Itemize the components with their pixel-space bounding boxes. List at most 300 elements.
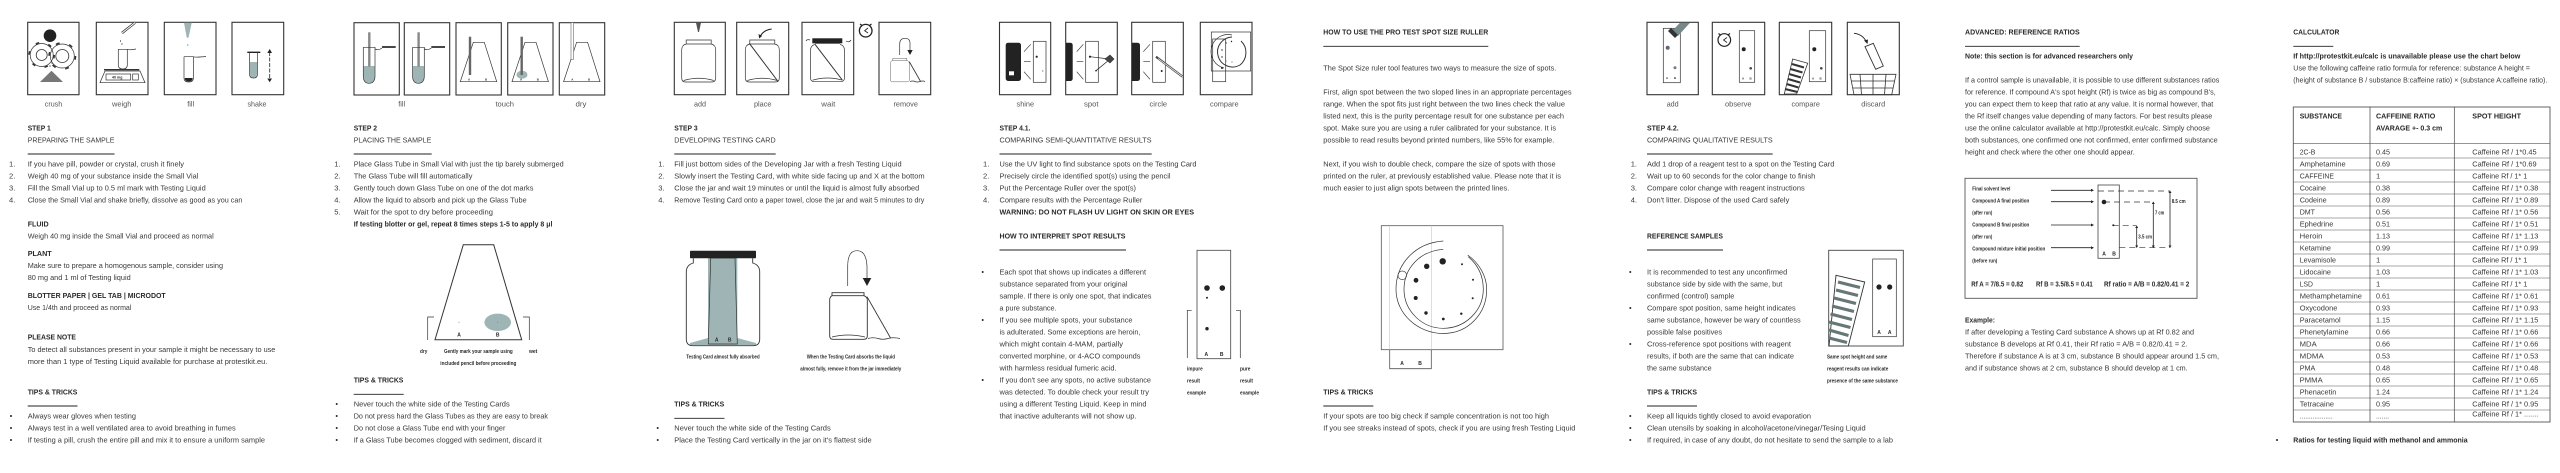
- label: place: place: [754, 99, 771, 108]
- icon: add reagent: B: [1674, 76, 1677, 80]
- ruler explanation: listed next, this is the purity percentage result for one substance per each: [1323, 112, 1564, 121]
- table: caffeine ratios: 0.38: [2376, 184, 2390, 193]
- tips and tricks: Keep all liquids tightly closed to avoid evaporation: [1647, 412, 1811, 421]
- table: caffeine ratios: Caffeine Rf / 1*0.45: [2472, 148, 2537, 157]
- table: caffeine ratios: Caffeine Rf / 1* 0.93: [2472, 304, 2538, 313]
- steps list: Don't litter. Dispose of the used Card safely: [1647, 196, 1789, 205]
- label: wait: wait: [820, 99, 836, 108]
- diagram: spot example card: impure: [1187, 367, 1203, 373]
- icon: place: [737, 22, 789, 95]
- steps list: Add 1 drop of a reagent test to a spot on the Testing Card: [1647, 160, 1834, 169]
- tips and tricks: Always wear gloves when testing: [28, 412, 136, 421]
- ruler explanation: possible to read results beyond printed numbers, like 55% for example.: [1323, 136, 1554, 145]
- steps list: 4.: [983, 196, 989, 205]
- steps list: 1.: [983, 160, 989, 169]
- table: caffeine ratios: MDMA: [2300, 352, 2325, 361]
- interpretation text: a pure substance.: [1000, 304, 1056, 313]
- tips and tricks: Place the Testing Card vertically in the jar on it's flattest side: [674, 436, 872, 445]
- label: crush: crush: [45, 99, 62, 108]
- heading: interpret spot results: HOW TO INTERPRET SPOT RESULTS: [1000, 232, 1126, 241]
- icon: shake: [232, 22, 284, 95]
- ratios explanation: for reference. If compound A's spot height (Rf) is twice as big as compound B's,: [1965, 88, 2216, 97]
- diagram: reference sample comparison: A: [1877, 330, 1881, 336]
- steps list: 3.: [334, 184, 341, 193]
- table: caffeine ratios: Phenetylamine: [2300, 328, 2349, 337]
- tips and tricks: If your spots are too big check if sample concentration is not too high: [1323, 412, 1549, 421]
- steps list: 5.: [334, 208, 341, 217]
- tips and tricks: Never touch the white side of the Testing Cards: [354, 400, 510, 409]
- sample types text: FLUID: [28, 220, 49, 229]
- steps list: 3.: [658, 184, 665, 193]
- label: shake: shake: [248, 99, 266, 108]
- please note: To detect all substances present in your sample it might be necessary to use: [28, 345, 275, 354]
- table: caffeine ratios: Caffeine Rf / 1*0.69: [2472, 160, 2537, 169]
- steps list: 4.: [658, 196, 665, 205]
- icon: add reagent: A: [1666, 76, 1669, 80]
- table: caffeine ratios: Phenacetin: [2300, 388, 2336, 397]
- table: caffeine ratios: Caffeine Rf / 1* 1.03: [2472, 268, 2538, 277]
- label: discard: discard: [1861, 99, 1885, 108]
- diagram: developing jar: [686, 251, 760, 361]
- heading: step 2: PLACING THE SAMPLE: [354, 135, 431, 144]
- label: shine: shine: [1017, 99, 1034, 108]
- icon: dry card: [559, 23, 605, 95]
- interpretation text: converted morphine, or 4-ACO compounds: [1000, 352, 1141, 361]
- icon: observe: [1712, 22, 1765, 95]
- diagram: reference sample comparison: reagent results can indicate: [1827, 367, 1888, 373]
- table: caffeine ratios: Oxycodone: [2300, 304, 2337, 313]
- steps list: If you have pill, powder or crystal, crush it finely: [28, 160, 184, 169]
- table: caffeine ratios: PMA: [2300, 364, 2316, 373]
- icon: touch card with spot: [508, 23, 553, 95]
- interpretation text: If you see multiple spots, your substance: [1000, 316, 1132, 325]
- interpretation text: sample. If there is only one spot, that indicates: [1000, 292, 1152, 301]
- heading: step 4.1: STEP 4.1.: [1000, 124, 1030, 133]
- table: caffeine ratios: Caffeine Rf / 1* 0.51: [2472, 220, 2538, 229]
- table: caffeine ratios: Caffeine Rf / 1* 0.95: [2472, 400, 2538, 409]
- label: remove: remove: [893, 99, 918, 108]
- heading: step 4.2: [1647, 124, 1773, 154]
- steps list: WARNING: DO NOT FLASH UV LIGHT ON SKIN OR EYES: [1000, 208, 1194, 217]
- example text: If after developing a Testing Card substance A shows up at Rf 0.82 and: [1965, 328, 2194, 337]
- chart: Rf diagram: Compound A final position: [1972, 198, 2029, 204]
- icon: touch card: B: [485, 78, 488, 82]
- heading: step 1: STEP 1: [28, 124, 51, 133]
- steps list: If testing blotter or gel, repeat 8 times steps 1-5 to apply 8 μl: [354, 220, 552, 229]
- steps list: Wait for the spot to dry before proceeding: [354, 208, 493, 217]
- ruler explanation: range. When the spot fits just right between the two lines check the value: [1323, 100, 1565, 109]
- reference samples text: substance side by side with the same, but: [1647, 280, 1783, 289]
- steps list: Compare color change with reagent instructions: [1647, 184, 1805, 193]
- label: spot: spot: [1084, 99, 1099, 108]
- reference samples text: [1629, 268, 1801, 373]
- steps list: Fill the Small Vial up to 0.5 ml mark with Testing Liquid: [28, 184, 206, 193]
- table: caffeine ratios: Cocaine: [2300, 184, 2326, 193]
- sample types text: Weigh 40 mg inside the Small Vial and proceed as normal: [28, 232, 214, 241]
- diagram: marked testing card: Gently mark your sample using: [444, 349, 513, 355]
- table: caffeine ratios: Caffeine Rf / 1* 0.89: [2472, 196, 2538, 205]
- label: compare: compare: [1791, 99, 1820, 108]
- heading: calculator: CALCULATOR: [2293, 27, 2340, 36]
- label: fill: fill: [398, 99, 406, 108]
- diagram: remove card: [800, 251, 901, 373]
- table: caffeine ratios: 0.95: [2376, 400, 2390, 409]
- steps list: 1.: [334, 160, 341, 169]
- calculator instructions: (height of substance B / substance B:caffeine ratio) × (substance A:caffeine ratio).: [2293, 75, 2547, 84]
- reference samples text: Compare spot position, same height indicates: [1647, 304, 1796, 313]
- diagram: reference sample comparison: [1827, 250, 1903, 385]
- tips and tricks: Never touch the white side of the Testing Cards: [674, 424, 831, 433]
- icon: fill: [164, 22, 216, 95]
- reference samples text: Cross-reference spot positions with reagent: [1647, 340, 1792, 349]
- ruler explanation: printed on the ruler, at previously established value. Please note that it is: [1323, 172, 1561, 181]
- icon: compare: [1779, 22, 1832, 95]
- interpretation text: is adulterated. Some exceptions are heroin,: [1000, 328, 1140, 337]
- note: Note: this section is for advanced researchers only: [1965, 52, 2134, 61]
- table: caffeine ratios: Levamisole: [2300, 256, 2336, 265]
- table: caffeine ratios: 0.61: [2376, 292, 2390, 301]
- table: caffeine ratios: Caffeine Rf / 1* 0.53: [2472, 352, 2538, 361]
- reference samples text: the same substance: [1647, 364, 1712, 373]
- icon: add reagent: [1647, 22, 1698, 95]
- tips and tricks: [657, 400, 872, 445]
- table: caffeine ratios: Caffeine Rf / 1* .......: [2472, 410, 2538, 419]
- footnote: Ratios for testing liquid with methanol and ammonia: [2293, 435, 2468, 444]
- icon: compare: B: [1820, 76, 1822, 80]
- diagram: spot size ruler: A: [1400, 361, 1404, 367]
- table: caffeine ratios: 1.15: [2376, 316, 2390, 325]
- steps list: Use the UV light to find substance spots on the Testing Card: [1000, 160, 1196, 169]
- table: caffeine ratios: [2293, 107, 2550, 422]
- ratios explanation: both substances, one confirmed one not confirmed, enter confirmed substance: [1965, 136, 2218, 145]
- heading: calculator: [2293, 27, 2340, 46]
- table: caffeine ratios: Caffeine Rf / 1* 1.15: [2472, 316, 2538, 325]
- label: fill: fill: [187, 99, 195, 108]
- table: caffeine ratios: 0.45: [2376, 148, 2390, 157]
- icon: touch card with spot: B: [537, 78, 540, 82]
- diagram: marked testing card: A: [457, 332, 461, 338]
- icon: weigh: [96, 22, 148, 95]
- chart: Rf diagram: Rf A = 7/8.5 = 0.82: [1971, 279, 2023, 288]
- steps list: 3.: [1631, 184, 1637, 193]
- icon: circle: [1132, 22, 1183, 95]
- label: observe: observe: [1725, 99, 1752, 108]
- icon: touch card: [456, 23, 501, 95]
- icon: wait: [802, 22, 854, 95]
- table: caffeine ratios: 0.66: [2376, 328, 2390, 337]
- tips and tricks: TIPS & TRICKS: [1323, 387, 1373, 396]
- steps list: Slowly insert the Testing Card, with white side facing up and X at the bottom: [674, 172, 925, 181]
- heading: reference ratios: [1965, 27, 2080, 46]
- table: caffeine ratios: 0.56: [2376, 208, 2390, 217]
- tips and tricks: If testing a pill, crush the entire pill and mix it to ensure a uniform sample: [28, 436, 265, 445]
- table: caffeine ratios: 1.13: [2376, 232, 2390, 241]
- ratios explanation: you can expect them to keep that ratio at any value. It is normal however, that: [1965, 100, 2214, 109]
- chart: Rf diagram: Rf B = 3.5/8.5 = 0.41: [2036, 279, 2093, 288]
- heading: step 3: DEVELOPING TESTING CARD: [674, 135, 776, 144]
- steps list: 1.: [1631, 160, 1637, 169]
- icon: touch card: A: [468, 78, 471, 82]
- diagram: marked testing card: included pencil before proceeding: [440, 361, 516, 367]
- steps list: 3.: [9, 184, 15, 193]
- icon: compare: [1200, 22, 1252, 95]
- diagram: spot example card: A: [1204, 352, 1208, 358]
- heading: reference samples: [1647, 231, 1723, 250]
- table: caffeine ratios: 0.89: [2376, 196, 2390, 205]
- diagram: marked testing card: wet: [528, 349, 538, 355]
- diagram: developing jar: Testing Card almost fully absorbed: [686, 355, 760, 361]
- icon: fill vial 1: [354, 23, 399, 95]
- tips and tricks: Do not press hard the Glass Tubes as they are easy to break: [354, 412, 548, 421]
- table: caffeine ratios: Caffeine Rf / 1* 0.99: [2472, 244, 2538, 253]
- tips and tricks: Do not close a Glass Tube end with your finger: [354, 424, 506, 433]
- table: caffeine ratios: 0.93: [2376, 304, 2390, 313]
- table: caffeine ratios: 1.03: [2376, 268, 2390, 277]
- panel: advanced reference ratios: [1965, 27, 2219, 373]
- steps list: 2.: [658, 172, 665, 181]
- icon: compare: A: [1812, 76, 1815, 80]
- heading: step 1: PREPARING THE SAMPLE: [28, 135, 114, 144]
- steps list: Wait up to 60 seconds for the color change to finish: [1647, 172, 1815, 181]
- interpretation text: [982, 268, 1152, 421]
- heading: spot size ruler: HOW TO USE THE PRO TEST SPOT SIZE RULLER: [1323, 27, 1489, 36]
- steps list: 4.: [9, 196, 15, 205]
- example text: [1965, 315, 2219, 373]
- steps list: Precisely circle the identified spot(s) using the pencil: [1000, 172, 1171, 181]
- diagram: spot example card: result: [1240, 379, 1253, 385]
- label: add: add: [1667, 99, 1679, 108]
- panel: spot size ruler: [1323, 27, 1575, 433]
- steps list: 1.: [9, 160, 15, 169]
- label: dry: dry: [576, 99, 587, 108]
- diagram: spot example card: result: [1187, 379, 1200, 385]
- icon: spot: [1066, 22, 1117, 95]
- label: weigh: weigh: [111, 99, 131, 108]
- table: caffeine ratios: .......: [2376, 412, 2389, 421]
- tips and tricks: TIPS & TRICKS: [28, 387, 77, 396]
- steps list: [334, 160, 564, 229]
- tips and tricks: If required, in case of any doubt, do not hesitate to send the sample to a lab: [1647, 436, 1893, 445]
- table: caffeine ratios: CAFFEINE RATIO: [2376, 111, 2435, 120]
- interpretation text: substance separated from your original: [1000, 280, 1128, 289]
- label: add: add: [694, 99, 706, 108]
- ruler explanation: The Spot Size ruler tool features two ways to measure the size of spots.: [1323, 63, 1556, 72]
- table: caffeine ratios: Paracetamol: [2300, 316, 2341, 325]
- heading: step 2: [354, 124, 432, 154]
- steps list: Gently touch down Glass Tube on one of the dot marks: [354, 184, 534, 193]
- icon: fill vial 2: [404, 23, 450, 95]
- tips and tricks: Clean utensils by soaking in alcohol/acetone/vinegar/Tesing Liquid: [1647, 424, 1866, 433]
- tips and tricks: TIPS & TRICKS: [354, 376, 403, 385]
- tips and tricks: If you see streaks instead of spots, check if you are using fresh Testing Liquid: [1323, 424, 1575, 433]
- table: caffeine ratios: 0.66: [2376, 340, 2390, 349]
- diagram: reference sample comparison: Same spot height and same: [1827, 355, 1887, 361]
- icon: dry card: B: [588, 78, 591, 82]
- table: caffeine ratios: CAFFEINE: [2300, 172, 2334, 181]
- steps list: The Glass Tube will fill automatically: [354, 172, 473, 181]
- steps list: 2.: [1631, 172, 1637, 181]
- steps list: [1631, 160, 1834, 205]
- interpretation text: using a different Testing Liquid. Keep in mind: [1000, 400, 1146, 409]
- interpretation text: If you don't see any spots, no active substance: [1000, 376, 1151, 385]
- table: caffeine ratios: Methamphetamine: [2300, 292, 2362, 301]
- tips and tricks: [10, 387, 265, 445]
- chart: Rf diagram: A: [2102, 252, 2106, 258]
- icon: add: [674, 22, 725, 95]
- steps list: [658, 160, 925, 205]
- diagram: marked testing card: dry: [420, 349, 428, 355]
- table: caffeine ratios: 0.48: [2376, 364, 2390, 373]
- calculator instructions: If http://protestkit.eu/calc is unavailable please use the chart below: [2293, 52, 2520, 61]
- chart: Rf diagram: Final solvent level: [1972, 186, 2011, 192]
- steps list: Put the Percentage Ruller over the spot(s): [1000, 184, 1136, 193]
- heading: reference samples: REFERENCE SAMPLES: [1647, 231, 1723, 240]
- table: caffeine ratios: Lidocaine: [2300, 268, 2331, 277]
- table: caffeine ratios: Caffeine Rf / 1* 1: [2472, 172, 2527, 181]
- steps list: [9, 160, 242, 205]
- diagram: spot size ruler: B: [1418, 361, 1422, 367]
- heading: interpret spot results: [1000, 232, 1126, 250]
- heading: step 4.2: STEP 4.2.: [1647, 124, 1679, 133]
- table: caffeine ratios: Caffeine Rf / 1* 0.61: [2472, 292, 2538, 301]
- table: caffeine ratios: Caffeine Rf / 1* 0.66: [2472, 328, 2538, 337]
- table: caffeine ratios: MDA: [2300, 340, 2318, 349]
- steps list: 2.: [334, 172, 341, 181]
- ruler explanation: much easier to just align spots between the printed lines.: [1323, 184, 1509, 193]
- steps list: Remove Testing Card onto a paper towel, close the jar and wait 5 minutes to dry: [674, 196, 924, 205]
- heading: step 4.2: COMPARING QUALITATIVE RESULTS: [1647, 135, 1773, 144]
- reference samples text: same substance, however be wary of countless: [1647, 316, 1801, 325]
- table: caffeine ratios: 1.24: [2376, 388, 2390, 397]
- panel: step 3: [657, 22, 931, 445]
- steps list: Fill just bottom sides of the Developing Jar with a fresh Testing Liquid: [674, 160, 902, 169]
- table: caffeine ratios: Codeine: [2300, 196, 2327, 205]
- table: caffeine ratios: Amphetamine: [2300, 160, 2346, 169]
- table: caffeine ratios: Caffeine Rf / 1* 0.48: [2472, 364, 2538, 373]
- ratios explanation: the Rf itself changes value depending of many factors. For best results please: [1965, 112, 2212, 121]
- chart: Rf diagram: 3.5 cm: [2138, 235, 2152, 241]
- steps list: Allow the liquid to absorb and pick up the Glass Tube: [354, 196, 527, 205]
- interpretation text: that inactive adulterants will not show up.: [1000, 412, 1136, 421]
- tips and tricks: [1629, 387, 1893, 445]
- heading: reference ratios: ADVANCED: REFERENCE RATIOS: [1965, 27, 2080, 36]
- table: caffeine ratios: DMT: [2300, 208, 2315, 217]
- table: caffeine ratios: PMMA: [2300, 376, 2324, 385]
- ruler explanation: spot. Make sure you are using a ruler calibrated for your substance. It is: [1323, 124, 1556, 133]
- table: caffeine ratios: ..................: [2300, 412, 2333, 421]
- steps list: Close the jar and wait 19 minutes or until the liquid is almost fully absorbed: [674, 184, 919, 193]
- chart: Rf diagram: B: [2112, 252, 2116, 258]
- table: caffeine ratios: 0.53: [2376, 352, 2390, 361]
- table: caffeine ratios: Heroin: [2300, 232, 2322, 241]
- ratios explanation: height and check where the other one should appear.: [1965, 148, 2135, 157]
- table: caffeine ratios: Caffeine Rf / 1* 0.56: [2472, 208, 2538, 217]
- sample types text: [28, 220, 223, 312]
- tips and tricks: TIPS & TRICKS: [674, 400, 724, 409]
- heading: step 3: STEP 3: [674, 124, 698, 133]
- panel: step 2: [334, 23, 605, 445]
- icon: dry card: A: [571, 78, 574, 82]
- table: caffeine ratios: AVARAGE +- 0.3 cm: [2376, 123, 2443, 132]
- table: caffeine ratios: LSD: [2300, 280, 2313, 289]
- icon: weigh: 40 mg: [112, 76, 122, 80]
- reference samples text: possible false positives: [1647, 328, 1722, 337]
- table: caffeine ratios: Caffeine Rf / 1* 1: [2472, 280, 2527, 289]
- steps list: 3.: [983, 184, 989, 193]
- heading: step 3: [674, 124, 776, 154]
- example text: and if substance shows at 2 cm, substance B should develop at 1 cm.: [1965, 364, 2188, 373]
- tips and tricks: If a Glass Tube becomes clogged with sediment, discard it: [354, 436, 543, 445]
- steps list: 2.: [983, 172, 989, 181]
- sample types text: Use 1/4th and proceed as normal: [28, 303, 132, 312]
- icon: timer: [859, 24, 872, 37]
- table: caffeine ratios: Caffeine Rf / 1* 1: [2472, 256, 2527, 265]
- diagram: developing jar: B: [728, 338, 732, 344]
- table: caffeine ratios: 2C-B: [2300, 148, 2315, 157]
- diagram: reference sample comparison: presence of the same substance: [1827, 379, 1898, 385]
- tips and tricks: TIPS & TRICKS: [1647, 387, 1697, 396]
- heading: step 4.1: COMPARING SEMI-QUANTITATIVE RESULTS: [1000, 135, 1152, 144]
- steps list: Weigh 40 mg of your substance inside the Small Vial: [28, 172, 199, 181]
- chart: Rf diagram: (after run): [1972, 234, 1993, 240]
- chart: Rf diagram: [1965, 178, 2197, 298]
- panel: step 1: [9, 22, 284, 445]
- table: caffeine ratios: 0.65: [2376, 376, 2390, 385]
- table: caffeine ratios: 1: [2376, 256, 2380, 265]
- reference samples text: It is recommended to test any unconfirmed: [1647, 268, 1787, 277]
- diagram: spot example card: B: [1220, 352, 1224, 358]
- table: caffeine ratios: 0.99: [2376, 244, 2390, 253]
- table: caffeine ratios: Caffeine Rf / 1* 0.38: [2472, 184, 2538, 193]
- diagram: spot example card: example: [1187, 391, 1206, 397]
- steps list: 4.: [1631, 196, 1637, 205]
- table: caffeine ratios: 1: [2376, 172, 2380, 181]
- chart: Rf diagram: (before run): [1972, 258, 1998, 264]
- steps list: 1.: [658, 160, 665, 169]
- please note: [28, 333, 275, 366]
- diagram: marked testing card: [420, 245, 538, 367]
- heading: step 1: [28, 124, 115, 154]
- ruler explanation: Next, if you wish to double check, compare the size of spots with those: [1323, 160, 1556, 169]
- table: caffeine ratios: Caffeine Rf / 1* 0.65: [2472, 376, 2538, 385]
- please note: more than 1 type of Testing Liquid available for purchase at protestkit.eu.: [28, 357, 267, 366]
- diagram: reference sample comparison: A: [1888, 330, 1892, 336]
- please note: PLEASE NOTE: [28, 333, 76, 342]
- table: caffeine ratios: 1: [2376, 280, 2380, 289]
- steps list: Place Glass Tube in Small Vial with just the tip barely submerged: [354, 160, 564, 169]
- table: caffeine ratios: Caffeine Rf / 1* 1.13: [2472, 232, 2538, 241]
- interpretation text: with harmless residual fumeric acid.: [999, 364, 1116, 373]
- diagram: spot size ruler: [1381, 226, 1503, 369]
- sample types text: PLANT: [28, 249, 52, 258]
- chart: Rf diagram: Compound mixture initial position: [1972, 246, 2045, 252]
- icon: observe: A: [1742, 76, 1745, 80]
- label: touch: touch: [495, 99, 514, 108]
- example text: substance B develops at Rf 0.41, their Rf ratio = A/B = 0.82/0.41 = 2.: [1965, 340, 2187, 349]
- steps list: Compare results with the Percentage Ruller: [1000, 196, 1143, 205]
- label: circle: circle: [1150, 99, 1167, 108]
- chart: Rf diagram: 7 cm: [2155, 211, 2165, 217]
- diagram: spot example card: pure: [1240, 367, 1251, 373]
- tips and tricks: [1323, 387, 1575, 433]
- steps list: [983, 160, 1196, 217]
- steps list: Close the Small Vial and shake briefly, dissolve as good as you can: [28, 196, 242, 205]
- table: caffeine ratios: Caffeine Rf / 1* 1.24: [2472, 388, 2538, 397]
- panel: step 4.2: [1629, 22, 1903, 445]
- diagram: remove card: almost fully, remove it from the jar immediately: [800, 367, 901, 373]
- reference samples text: confirmed (control) sample: [1647, 292, 1734, 301]
- tips and tricks: [336, 376, 548, 445]
